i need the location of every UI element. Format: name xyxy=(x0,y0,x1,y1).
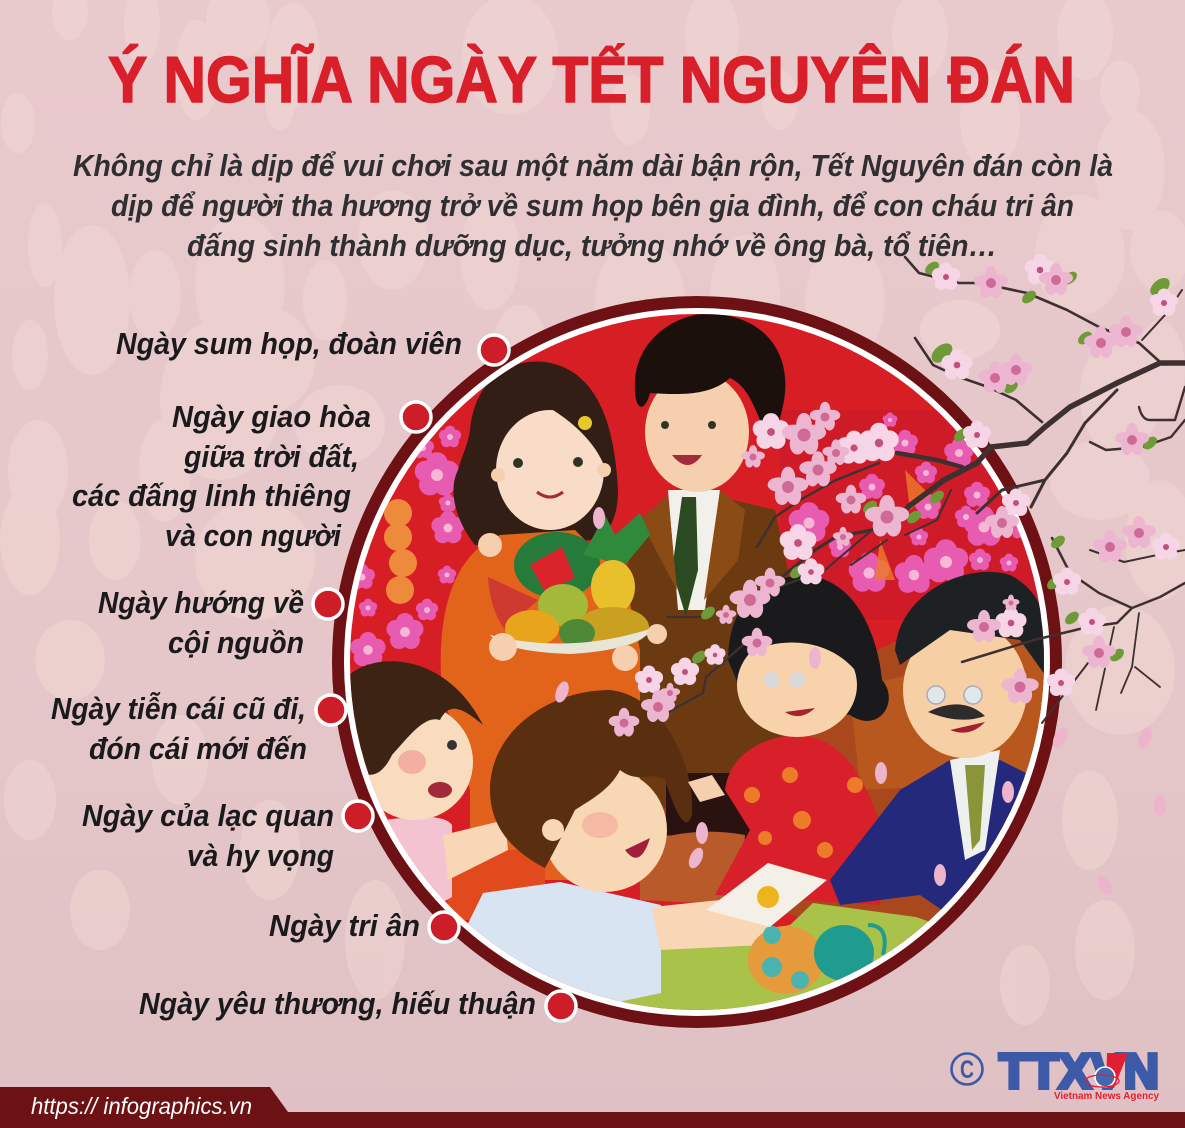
woman xyxy=(441,361,640,880)
label: tiễn cũ xyxy=(51,691,307,766)
label: sum họp: Ngày sum họp, đoàn viên xyxy=(116,326,462,361)
footer url: https:// infographics.vn xyxy=(31,1093,252,1119)
label: tri ân: Ngày tri ân xyxy=(269,908,420,943)
intro text block xyxy=(73,148,1113,263)
label: giao hòa: giữa trời đất, xyxy=(183,439,359,474)
grandpa xyxy=(830,572,1044,910)
kid on the left xyxy=(344,661,545,920)
family scene xyxy=(350,314,1044,1010)
dark red ring xyxy=(332,296,1062,1028)
label: lạc quan: Ngày của lạc quan xyxy=(82,798,334,833)
label: tiễn cũ: đón cái mới đến xyxy=(89,731,307,766)
cherry blossoms xyxy=(609,254,1180,737)
label: giao hòa: Ngày giao hòa xyxy=(172,399,371,434)
grandma xyxy=(688,576,889,905)
sofa xyxy=(786,622,1044,948)
copyright icon xyxy=(952,1054,982,1084)
intro text block: đấng sinh thành dưỡng dục, tưởng nhớ về ông bà, tổ tiên… xyxy=(187,228,997,263)
falling petals xyxy=(553,507,1166,898)
bullet: giao hòa xyxy=(401,402,431,432)
intro text block: Không chỉ là dịp để vui chơi sau một năm dài bận rộn, Tết Nguyên đán còn là xyxy=(73,148,1113,183)
bullet: sum họp xyxy=(479,335,509,365)
white ring xyxy=(344,308,1050,1016)
TTXVN logo: TTXVN xyxy=(999,1045,1159,1099)
cherry blossom branches xyxy=(667,257,1185,723)
label: giao hòa: các đấng linh thiêng xyxy=(72,478,351,513)
bullet: tiễn cũ xyxy=(316,695,346,725)
bullet: lạc quan xyxy=(343,801,373,831)
bullet: tri ân xyxy=(429,912,459,942)
leaves xyxy=(690,259,1173,666)
circular family illustration xyxy=(330,296,1070,1040)
label: cội nguồn: Ngày hướng về xyxy=(98,585,304,620)
label: giao hòa xyxy=(72,399,371,553)
tea set xyxy=(748,925,885,994)
decorative pink blossoms on red wall xyxy=(349,410,1050,666)
label: cội nguồn xyxy=(98,585,304,660)
bullet: hiếu thuận xyxy=(546,991,576,1021)
orange sofa arm and dark gap xyxy=(666,773,750,843)
label: lạc quan: và hy vọng xyxy=(187,838,334,873)
intro text block: dịp để người tha hương trở về sum họp bên gia đình, để con cháu tri ân xyxy=(111,188,1074,223)
footer bar xyxy=(0,1087,1185,1128)
man xyxy=(628,314,790,808)
copyright icon: C xyxy=(960,1056,974,1084)
title: Ý NGHĨA NGÀY TẾT NGUYÊN ĐÁN xyxy=(108,43,1075,116)
label: tiễn cũ: Ngày tiễn cái cũ đi, xyxy=(51,691,306,726)
fruit tray xyxy=(488,513,667,671)
boy in the centre xyxy=(455,690,770,1010)
greeting card xyxy=(706,863,827,927)
table xyxy=(609,903,928,1010)
TTXVN logo: Vietnam News Agency xyxy=(1054,1090,1159,1102)
label: giao hòa: và con người xyxy=(165,518,342,553)
label: hiếu thuận: Ngày yêu thương, hiếu thuận xyxy=(139,986,536,1021)
bullet: cội nguồn xyxy=(313,589,343,619)
label: lạc quan xyxy=(82,798,334,873)
label: cội nguồn: cội nguồn xyxy=(168,625,304,660)
